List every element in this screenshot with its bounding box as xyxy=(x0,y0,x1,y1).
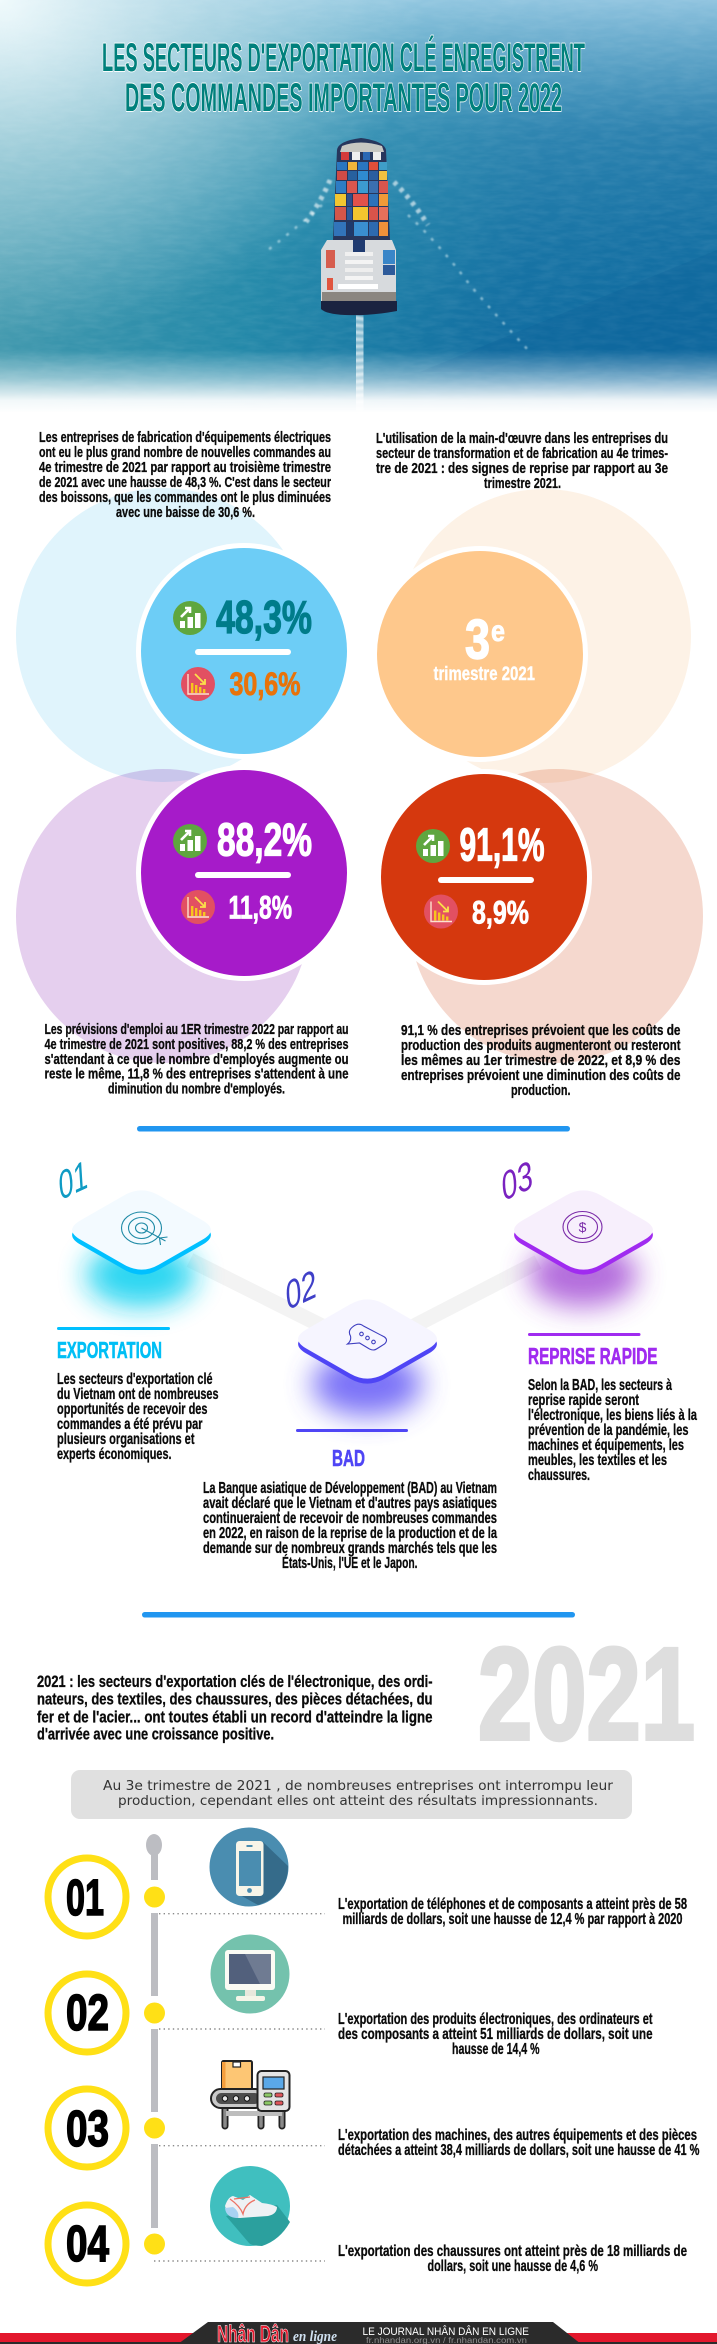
text block: employment: Les prévisions d'emploi au 1ER trimestre 2022 par rapport au xyxy=(44,1022,348,1038)
icon: conveyor machine xyxy=(211,2061,290,2126)
number badge 02: 02 xyxy=(66,1984,109,2041)
step 01: exportation: opportunités de recevoir des xyxy=(57,1401,208,1418)
step 01: exportation: du Vietnam ont de nombreuses xyxy=(57,1386,218,1403)
circle: 3e trimestre 2021 xyxy=(372,546,588,762)
stat circle: 48,3% / 30,6% xyxy=(136,543,352,759)
step 03: reprise rapide: REPRISE RAPIDE xyxy=(528,1343,658,1369)
text block: 2021 intro: nateurs, des textiles, des chaussures, des pièces détachées, du xyxy=(37,1690,432,1708)
number badge 03: 03 xyxy=(66,2100,109,2157)
step 02: BAD xyxy=(203,1262,497,1572)
stat circle: 48,3% / 30,6%: 48,3% xyxy=(216,591,312,643)
text block: electronics: hausse de 14,4 % xyxy=(452,2041,540,2058)
icon tile: dollar coin xyxy=(514,1190,653,1275)
icon: rising chart xyxy=(173,601,207,635)
step 02: BAD: en 2022, en raison de la reprise de la production et de la xyxy=(203,1525,497,1542)
pale background circles xyxy=(16,488,703,1063)
text block: production costs: production. xyxy=(511,1083,570,1099)
step 02: BAD: continueraient de recevoir de nombreuses commandes xyxy=(203,1510,497,1527)
step 01: exportation: 01 xyxy=(54,1153,92,1209)
text block: new orders: 4e trimestre de 2021 par rapport au troisième trimestre xyxy=(39,460,331,476)
icon tile: target xyxy=(72,1190,211,1275)
stat circle: 48,3% / 30,6%: 30,6% xyxy=(230,666,300,702)
text block: new orders: ont eu le plus grand nombre de nouvelles commandes au xyxy=(39,445,331,461)
step 01: exportation xyxy=(54,1153,218,1463)
text block: employment: reste le même, 11,8 % des entreprises s'attendent à une xyxy=(44,1066,348,1082)
icon: rising chart xyxy=(173,824,207,858)
step 02: BAD: États-Unis, l'UE et le Japon. xyxy=(282,1555,418,1572)
hero photo: container ship at sea xyxy=(0,0,717,413)
step 03: reprise rapide: meubles, les textiles et les xyxy=(528,1452,667,1469)
step 02: BAD: avait déclaré que le Vietnam et d'autres pays asiatiques xyxy=(203,1495,497,1512)
footer xyxy=(0,2321,717,2344)
step 01: exportation: plusieurs organisations et xyxy=(57,1431,194,1448)
icon: smartphone xyxy=(210,1828,288,1906)
icon: sneaker xyxy=(210,2166,290,2246)
number badge 01: 01 xyxy=(66,1869,104,1926)
text block: employment: diminution du nombre d'employés. xyxy=(108,1082,285,1098)
text block: shoes xyxy=(338,2243,687,2275)
stat circle: 91,1% / 8,9%: 91,1% xyxy=(460,818,544,870)
icon: falling chart xyxy=(181,890,215,924)
connectors between steps xyxy=(190,1260,538,1326)
number badge 03 xyxy=(48,2089,126,2167)
stat circle: 88,2% / 11,8%: 11,8% xyxy=(228,890,292,926)
divider bar xyxy=(142,1612,575,1618)
callout: Q3 2021 xyxy=(71,1770,632,1819)
step 02: BAD: 02 xyxy=(281,1262,320,1319)
stat circle: 88,2% / 11,8%: 88,2% xyxy=(217,814,312,866)
text block: 2021 intro: 2021 : les secteurs d'exportation clés de l'électronique, des ordi- xyxy=(37,1673,432,1691)
step 03: reprise rapide: 03 xyxy=(497,1153,536,1210)
step 02: BAD: La Banque asiatique de Développement (BAD) au Vietnam xyxy=(203,1480,497,1497)
text block: new orders: Les entreprises de fabrication d'équipements électriques xyxy=(39,430,331,446)
text block: workforce xyxy=(376,431,668,492)
step 01: exportation: EXPORTATION xyxy=(57,1337,162,1363)
icon: falling chart xyxy=(181,667,215,701)
text block: 2021 intro: fer et de l'acier... ont toutes établi un record d'atteindre la ligne xyxy=(37,1708,432,1726)
number badge 01 xyxy=(48,1858,126,1936)
text block: employment xyxy=(44,1022,348,1098)
stat circle: 91,1% / 8,9%: 8,9% xyxy=(472,894,529,930)
icon tile: speech bubble xyxy=(298,1299,437,1384)
icon: falling chart xyxy=(424,894,458,928)
icon tile: dollar coin: $ xyxy=(579,1219,587,1235)
text block: employment: 4e trimestre de 2021 sont positives, 88,2 % des entreprises xyxy=(44,1037,348,1053)
callout: Q3 2021: Au 3e trimestre de 2021 , de nombreuses entreprises ont interrompu leur xyxy=(103,1779,614,1794)
text block: new orders xyxy=(39,430,331,521)
text block: new orders: de 2021 avec une hausse de 48,3 %. C'est dans le secteur xyxy=(39,475,331,491)
text block: shoes: dollars, soit une hausse de 4,6 % xyxy=(428,2258,598,2275)
step 02: BAD: BAD xyxy=(332,1445,365,1471)
step 01: exportation: Les secteurs d'exportation clé xyxy=(57,1371,213,1388)
text block: employment: s'attendant à ce que le nombre d'employés augmente ou xyxy=(44,1052,348,1068)
divider bar xyxy=(137,1126,570,1132)
text block: electronics xyxy=(338,2011,653,2058)
title xyxy=(102,35,585,120)
step 03: reprise rapide: chaussures. xyxy=(528,1467,590,1484)
text block: phones xyxy=(338,1896,687,1928)
stat circle: 91,1% / 8,9% xyxy=(376,769,592,985)
text block: new orders: des boissons, que les commandes ont le plus diminuées xyxy=(39,490,331,506)
step 01: exportation: experts économiques. xyxy=(57,1446,172,1463)
number badge 04: 04 xyxy=(66,2215,109,2272)
step 02: BAD: demande sur de nombreux grands marchés tels que les xyxy=(203,1540,497,1557)
step 03: reprise rapide: reprise rapide seront xyxy=(528,1392,639,1409)
text block: workforce: trimestre 2021. xyxy=(484,476,561,492)
text block: 2021 intro xyxy=(37,1673,432,1744)
number badge 04 xyxy=(48,2205,126,2283)
ship xyxy=(321,138,397,315)
text block: 2021 intro: d'arrivée avec une croissance positive. xyxy=(37,1726,274,1744)
circle: 3e trimestre 2021: e xyxy=(491,615,505,648)
step 01: exportation: commandes a été prévu par xyxy=(57,1416,202,1433)
footer: LE JOURNAL NHÂN DÂN EN LIGNE xyxy=(362,2325,529,2338)
callout: Q3 2021: production, cependant elles ont atteint des résultats impressionnants. xyxy=(118,1794,598,1809)
number badge 02 xyxy=(48,1974,126,2052)
step 03: reprise rapide xyxy=(497,1153,697,1484)
icon: rising chart xyxy=(416,829,450,863)
text block: machines xyxy=(338,2127,700,2159)
stat circle: 88,2% / 11,8% xyxy=(136,765,352,981)
text block: production costs xyxy=(401,1023,681,1099)
timeline spine xyxy=(144,1834,325,2261)
text block: new orders: avec une baisse de 30,6 %. xyxy=(116,505,255,521)
circle: 3e trimestre 2021: trimestre 2021 xyxy=(434,664,535,685)
icon: computer monitor xyxy=(210,1934,290,2014)
circle: 3e trimestre 2021: 3 xyxy=(465,608,490,670)
